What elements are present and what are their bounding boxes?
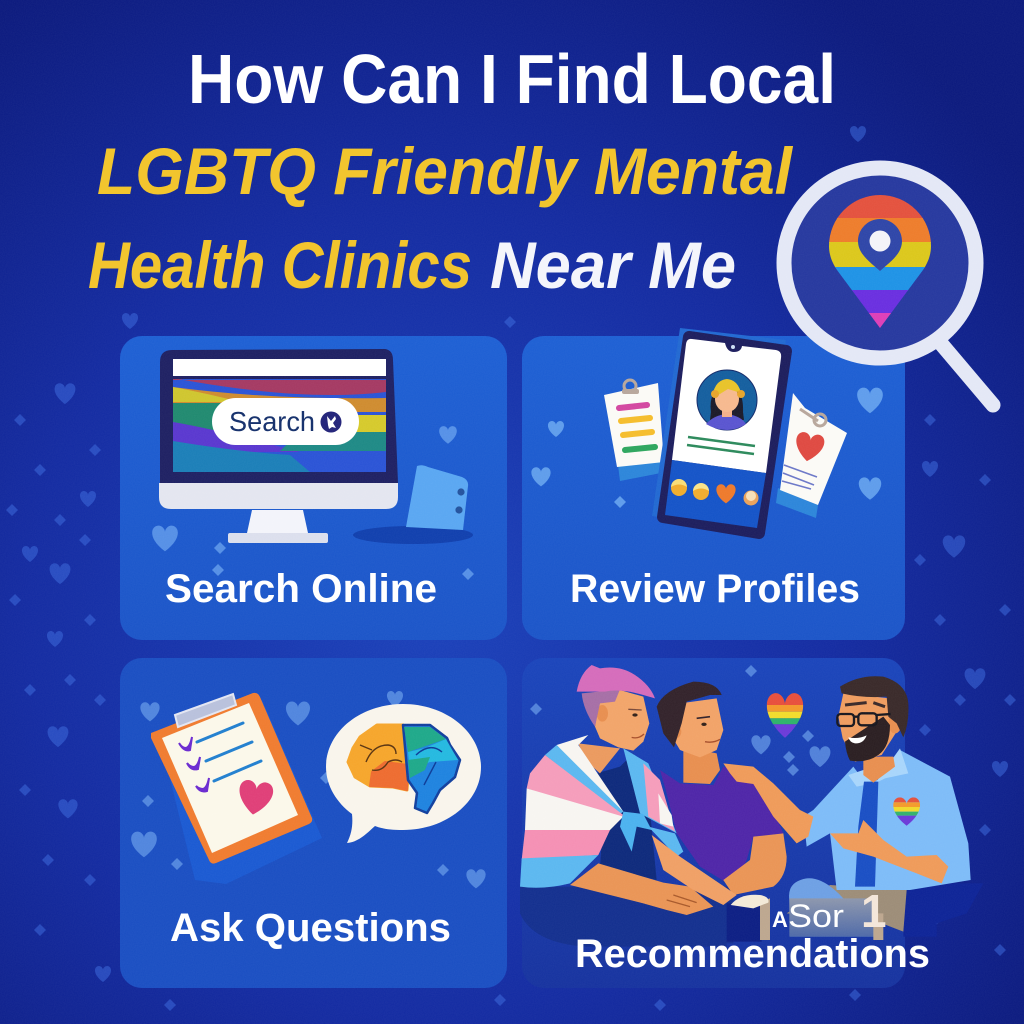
chairs and seats: [520, 883, 983, 947]
arms and clasped hands: [570, 863, 713, 915]
person: therapist: [803, 676, 971, 890]
brain: [348, 725, 460, 813]
label: ask questions: Ask Questions: [170, 906, 451, 950]
panel: search online: [120, 336, 507, 640]
icon: right heart card: [776, 393, 847, 518]
artifact text: 1: [861, 885, 887, 937]
artifact text: A: [772, 907, 788, 932]
shirt rainbow heart: [893, 797, 920, 826]
title: How Can I Find Local: [188, 40, 836, 118]
title: Near Me: [490, 228, 736, 302]
icon: rainbow location pin: [825, 193, 935, 329]
artifact text: [772, 885, 887, 937]
profile avatar: [697, 370, 757, 430]
person: person with trans flag: [520, 665, 737, 915]
rating icons: [671, 479, 758, 506]
title: [88, 40, 836, 302]
panel: ask questions: [120, 658, 507, 988]
illustration: three people talking: [520, 665, 983, 947]
therapist arm on shoulder: [723, 763, 813, 843]
icon: left checklist card: [604, 380, 666, 481]
trans flag cape: [520, 735, 683, 888]
artifact text: Sor: [788, 898, 844, 934]
panel: recommendations: [520, 658, 983, 988]
gesturing hand: [830, 820, 948, 883]
magnifying glass with rainbow pin: [784, 168, 993, 405]
label: search online: Search Online: [165, 567, 437, 611]
icon: speech bubble with brain: [326, 704, 481, 843]
rainbow heart: [766, 693, 804, 738]
person: friend in purple: [657, 682, 787, 895]
search pill: [212, 398, 359, 445]
search pill: Search: [229, 406, 315, 437]
title: LGBTQ Friendly Mental: [97, 134, 794, 208]
icon: smartphone with profile: [652, 328, 786, 533]
legs and artifact blocks: [731, 878, 907, 940]
title: Health Clinics: [88, 228, 472, 302]
icon: clipboard checklist: [151, 693, 322, 884]
icon: desktop computer with search bar: [159, 349, 398, 543]
label: review profiles: Review Profiles: [570, 567, 860, 611]
label: recommendations: Recommendations: [575, 932, 930, 976]
panel: review profiles: [522, 328, 905, 640]
icon: speaker device: [353, 465, 473, 544]
